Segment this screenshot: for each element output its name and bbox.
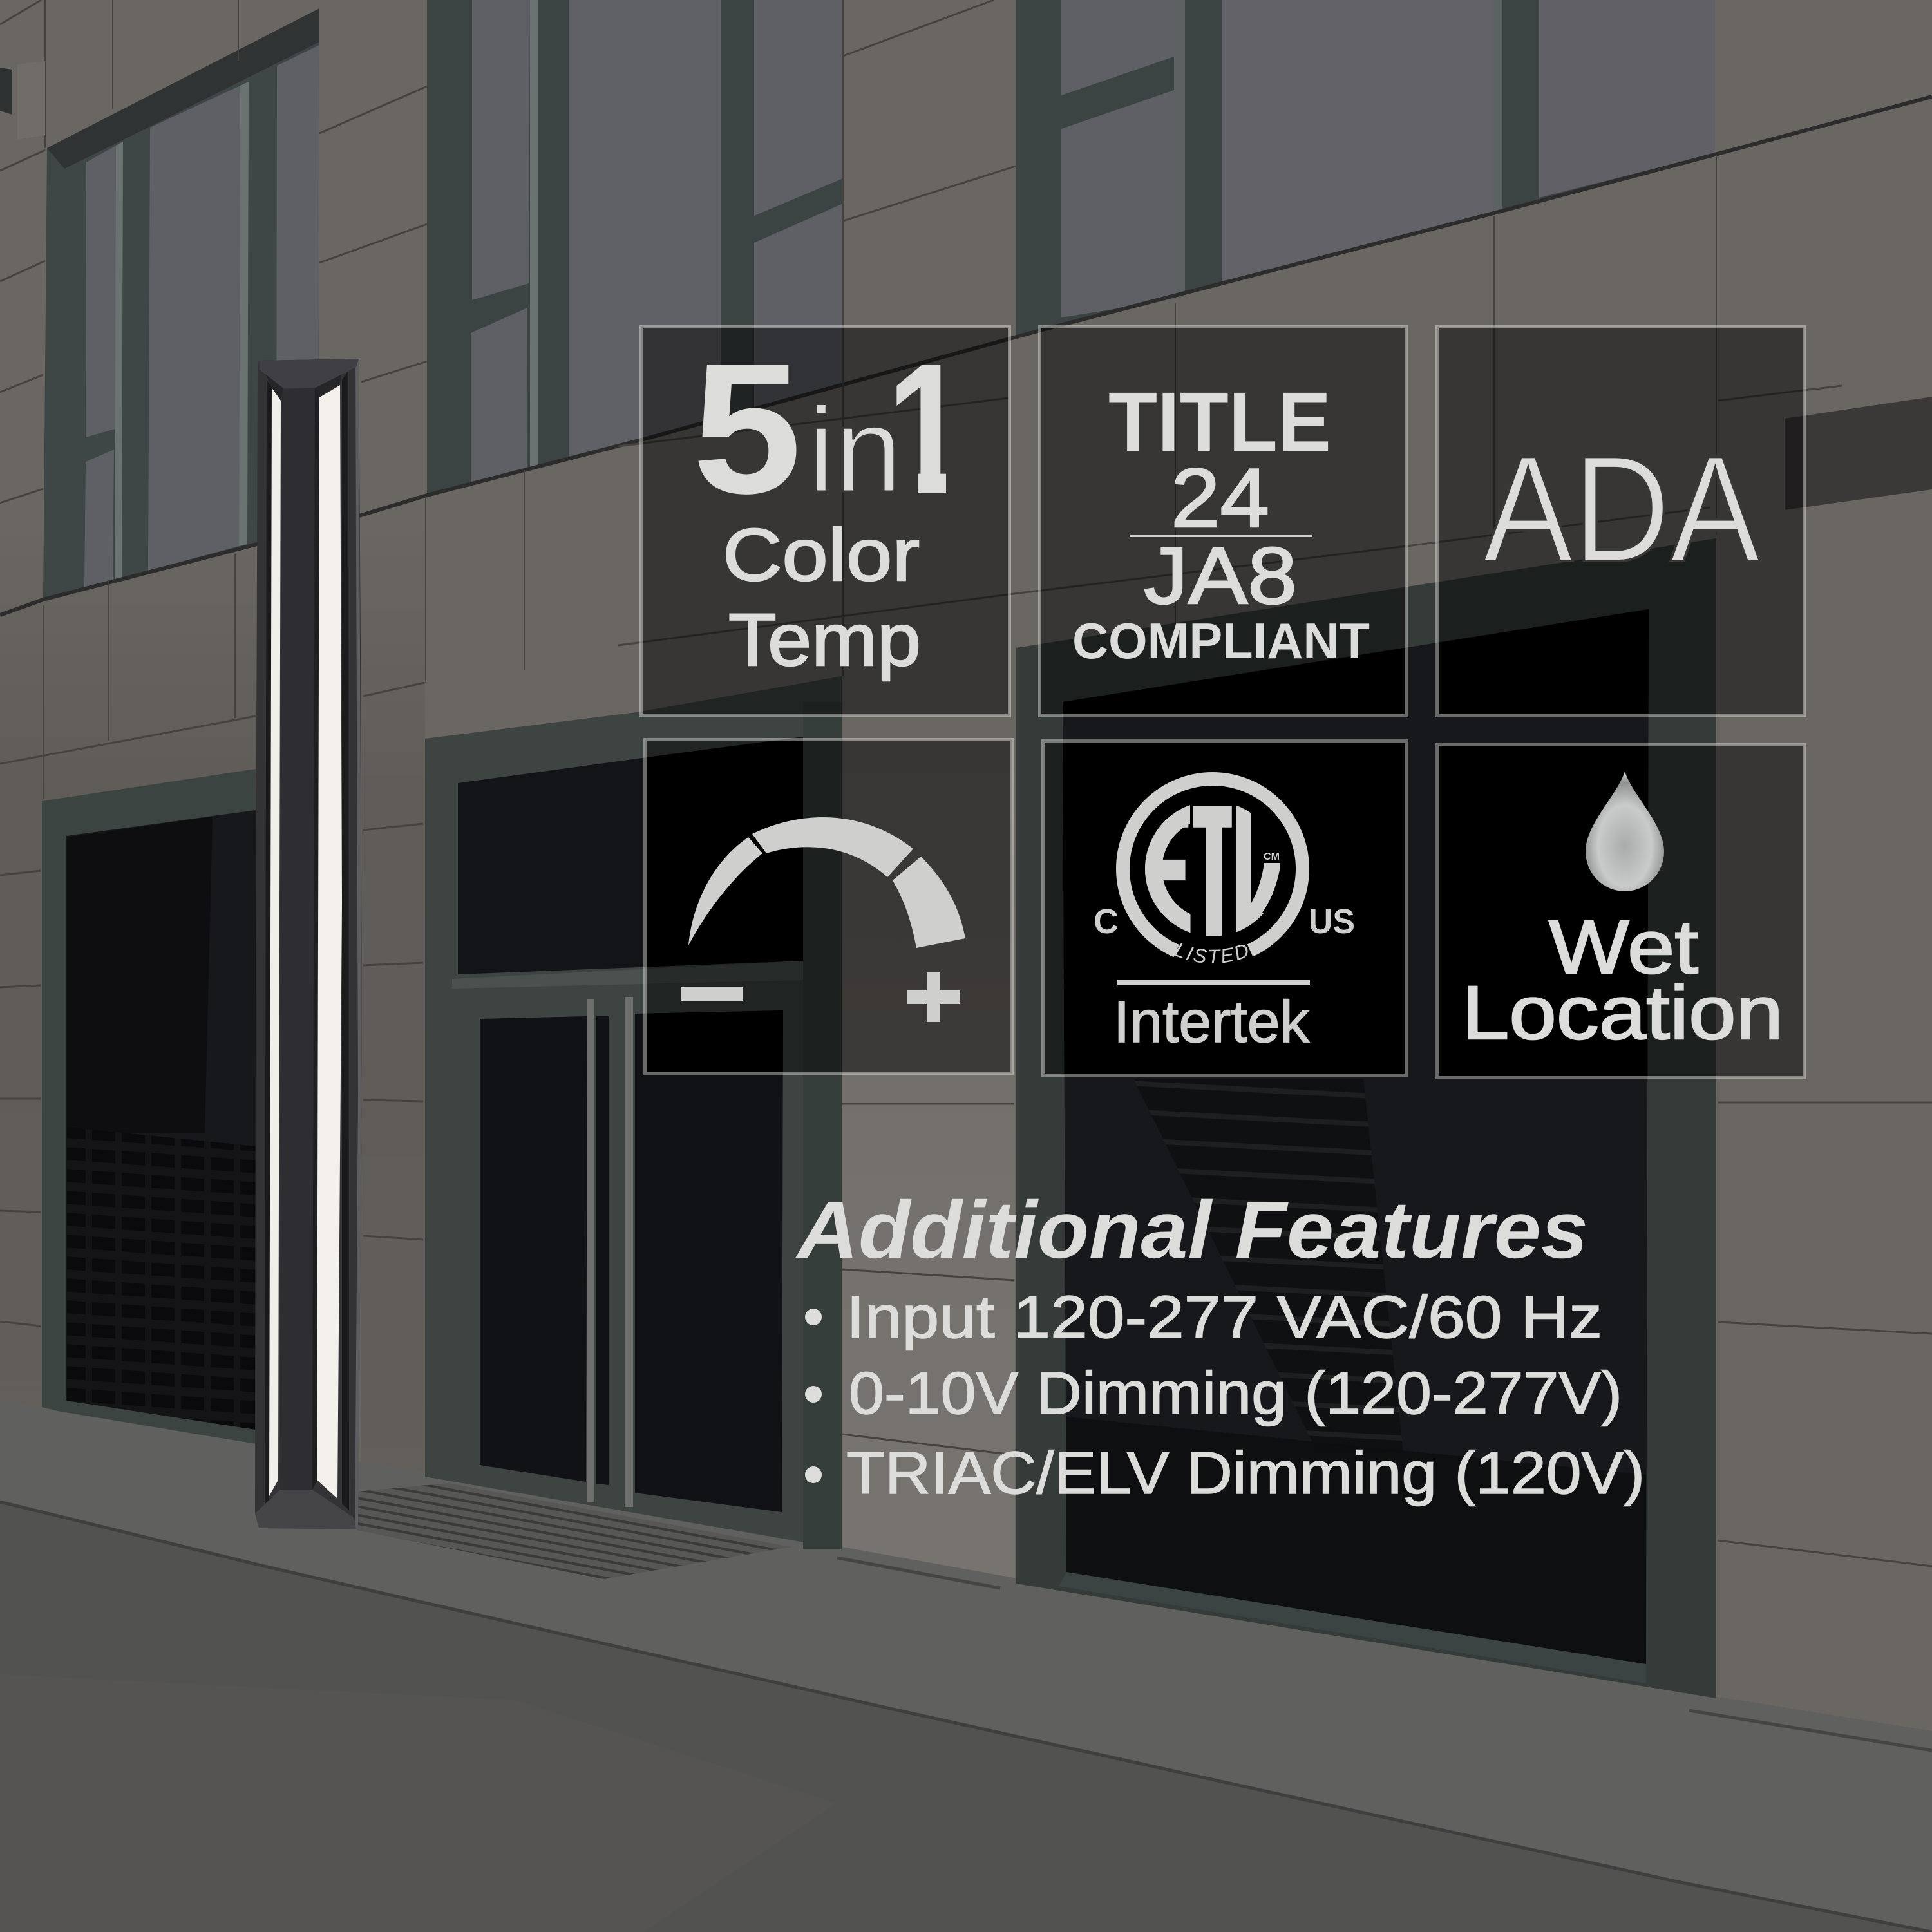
Intertek: Intertek: [1113, 989, 1310, 1055]
lamp bottom cap: [255, 1490, 356, 1530]
right storefront window: [1016, 538, 1716, 1698]
lamp light strip left: [269, 388, 281, 1496]
COMPLIANT: COMPLIANT: [1072, 612, 1370, 669]
icon: ETL mark: [1094, 772, 1355, 963]
product: linear wall sconce: [255, 359, 362, 1530]
panel: wet location: [1437, 744, 1804, 1078]
ETL letters: [1145, 805, 1280, 936]
icon: water drop: [1586, 772, 1664, 891]
ETL letters: L: [1229, 765, 1294, 974]
LISTED: LISTED: [1175, 943, 1248, 963]
right wall fixture: [1785, 397, 1932, 510]
JA8: JA8: [1144, 531, 1297, 621]
wall sconce far left: [0, 61, 45, 140]
TITLE: TITLE: [1108, 374, 1331, 469]
bullet: input voltage: Input 120-277 VAC/60 Hz: [846, 1283, 1602, 1350]
24: 24: [1171, 451, 1269, 545]
Wet: Wet: [1549, 905, 1698, 990]
number 5: 5: [692, 325, 802, 533]
ETL letters: E: [1126, 766, 1195, 975]
entrance doors: [425, 676, 842, 1549]
additional features list: [795, 1184, 1645, 1506]
panel: 5 in 1 color temp: [641, 325, 1010, 716]
label Color: Color: [723, 514, 920, 596]
Location: Location: [1462, 971, 1783, 1056]
pavement: [0, 1401, 1932, 1932]
lower left window: [42, 769, 256, 1444]
panel: dimmable: [645, 739, 1012, 1073]
C: C: [1094, 902, 1119, 941]
bullet: 0-10V dimming: 0-10V Dimming (120-277V): [849, 1359, 1622, 1426]
icon: minus: [681, 987, 743, 1001]
lamp light strip right: [317, 385, 342, 1499]
upper window 3: [1016, 0, 1715, 337]
ETL letters: T: [1192, 765, 1233, 980]
upper window 2: [427, 0, 843, 495]
glass under panels reads pure black: [643, 609, 1649, 1079]
number 1: 1: [887, 325, 967, 533]
label Temp: Temp: [728, 599, 921, 681]
upper window 1: [43, 8, 319, 600]
word in: in: [808, 383, 902, 517]
ADA text: ADA: [1483, 424, 1760, 593]
US: US: [1309, 902, 1355, 941]
heading: Additional Features: [795, 1184, 1588, 1275]
panel: ETL listed Intertek: [1041, 739, 1408, 1077]
panel: ADA: [1437, 327, 1804, 716]
CM: CM: [1264, 851, 1280, 862]
icon: dimming dial: [681, 817, 965, 1022]
lamp top cap: [259, 359, 359, 388]
panel: title 24 JA8 compliant: [1039, 326, 1406, 716]
bullet: TRIAC/ELV dimming: TRIAC/ELV Dimming (120V): [846, 1439, 1645, 1506]
icon: plus: [907, 972, 960, 1022]
